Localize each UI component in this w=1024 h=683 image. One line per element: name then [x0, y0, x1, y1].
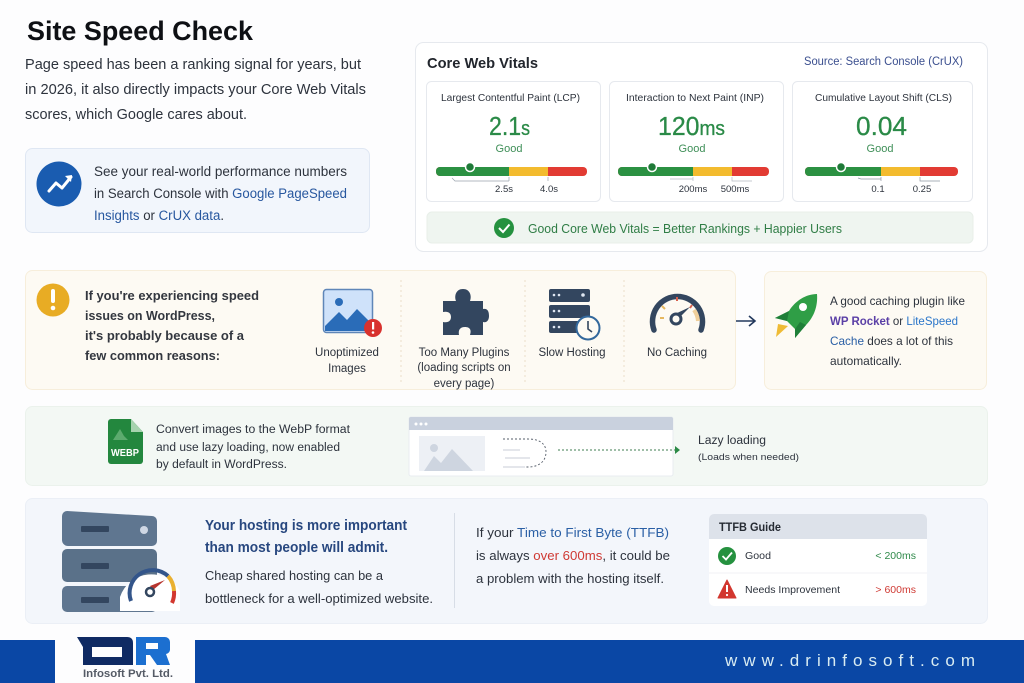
item: unoptimized images: [315, 290, 382, 375]
card: LCP: 2.1s: [489, 111, 530, 141]
icon: rocket: [775, 294, 817, 338]
callout text: [94, 164, 347, 223]
panel: search console callout: [26, 148, 370, 232]
heading: Core Web Vitals: [427, 55, 538, 72]
ttfb text: If your Time to First Byte (TTFB): [476, 526, 669, 540]
card: INP: Interaction to Next Paint (INP): [626, 92, 764, 104]
issues intro text: few common reasons:: [85, 348, 220, 363]
callout text: Insights or CrUX data.: [94, 208, 224, 223]
hosting heading: Your hosting is more important: [205, 518, 407, 534]
footer band: [0, 637, 1024, 683]
card: CLS: 0.04: [856, 111, 907, 141]
website url: www.drinfosoft.com: [724, 651, 975, 670]
hosting heading: than most people will admit.: [205, 540, 388, 556]
item: too many plugins: [417, 289, 511, 390]
dotted arrow: [558, 446, 680, 454]
caching text: WP Rocket or LiteSpeed: [830, 314, 958, 328]
icon: trend line: [36, 162, 82, 206]
icon: warning: [36, 284, 70, 316]
webp text: Convert images to the WebP format: [156, 424, 351, 436]
item: slow hosting: [538, 289, 606, 359]
title: Site Speed Check: [27, 16, 254, 46]
card: INP: Good: [679, 143, 705, 155]
card: CLS: 0.1: [871, 184, 885, 195]
logo: [77, 637, 173, 680]
panel: webp and lazy loading: [26, 406, 988, 486]
ttfb guide table: Good: [745, 550, 771, 562]
caching text: Cache does a lot of this: [830, 334, 953, 348]
caching text: A good caching plugin like: [830, 294, 965, 308]
card: LCP: Good: [496, 143, 522, 155]
issues intro text: [85, 288, 259, 363]
intro paragraph: Page speed has been a ranking signal for years, but: [25, 56, 362, 73]
card: CLS: [792, 82, 972, 202]
hosting body text: [205, 569, 433, 606]
icon: server with gauge: [62, 511, 180, 612]
lazy loading label: (Loads when needed): [698, 452, 799, 463]
webp text: and use lazy loading, now enabled: [156, 442, 340, 454]
caching text: automatically.: [830, 354, 902, 368]
ttfb text: [476, 526, 670, 586]
lazy loading label: Lazy loading: [698, 435, 766, 447]
logo: Infosoft Pvt. Ltd.: [83, 668, 173, 680]
card: LCP: 4.0s: [540, 184, 558, 195]
hosting body text: Cheap shared hosting can be a: [205, 569, 383, 583]
icon: webp file: WEBP: [111, 448, 139, 459]
ttfb text: a problem with the hosting itself.: [476, 572, 664, 586]
issues intro text: If you're experiencing speed: [85, 288, 259, 303]
item: too many plugins: every page): [434, 378, 495, 390]
issues intro text: it's probably because of a: [85, 328, 245, 343]
ttfb guide table: > 600ms: [875, 584, 916, 596]
browser lazy loading illustration: [409, 417, 673, 476]
item: no caching: [647, 296, 707, 359]
webp text: by default in WordPress.: [156, 459, 287, 471]
card: INP: [610, 82, 784, 202]
intro paragraph: [25, 56, 366, 123]
item: too many plugins: Too Many Plugins: [419, 347, 510, 359]
source note: Source: Search Console (CrUX): [804, 56, 963, 68]
banner: good core web vitals: [427, 212, 973, 243]
card: LCP: 2.5s: [495, 184, 513, 195]
callout text: See your real-world performance numbers: [94, 164, 347, 179]
card: CLS: Cumulative Layout Shift (CLS): [815, 92, 952, 104]
panel: hosting: [26, 498, 988, 624]
panel: common wordpress speed issues: [26, 270, 736, 390]
card: LCP: Largest Contentful Paint (LCP): [441, 92, 580, 104]
panel: core web vitals: [416, 42, 988, 252]
banner: good core web vitals: Good Core Web Vitals = Better Rankings + Happier Users: [528, 222, 842, 236]
card: CLS: 0.25: [913, 184, 931, 195]
hosting body text: bottleneck for a well-optimized website.: [205, 592, 433, 606]
item: slow hosting: Slow Hosting: [538, 347, 606, 359]
ttfb guide table: [709, 514, 927, 606]
caching text: [830, 294, 965, 368]
intro paragraph: scores, which Google cares about.: [25, 106, 247, 123]
card: INP: 200ms: [679, 184, 708, 195]
item: unoptimized images: Unoptimized: [315, 347, 379, 359]
card: INP: 120ms: [658, 111, 725, 141]
ttfb guide table: TTFB Guide: [719, 522, 781, 534]
issues intro text: issues on WordPress,: [85, 308, 215, 323]
ttfb guide table: < 200ms: [875, 550, 916, 562]
webp text: [156, 424, 351, 471]
card: INP: 500ms: [721, 184, 750, 195]
callout text: in Search Console with Google PageSpeed: [94, 186, 347, 201]
item: unoptimized images: Images: [328, 363, 366, 375]
item: too many plugins: (loading scripts on: [417, 362, 511, 374]
hosting heading: [205, 518, 407, 556]
icon: webp file: [108, 419, 143, 464]
card: CLS: Good: [867, 143, 893, 155]
intro paragraph: in 2026, it also directly impacts your Core Web Vitals: [25, 81, 366, 98]
card: LCP: [426, 82, 600, 202]
lazy loading label: [698, 435, 799, 463]
item: no caching: No Caching: [647, 347, 707, 359]
arrow to caching tip: [736, 316, 755, 326]
ttfb guide table: Needs Improvement: [745, 584, 840, 596]
panel: caching plugin tip: [764, 272, 986, 390]
ttfb text: is always over 600ms , it could be: [476, 549, 670, 563]
